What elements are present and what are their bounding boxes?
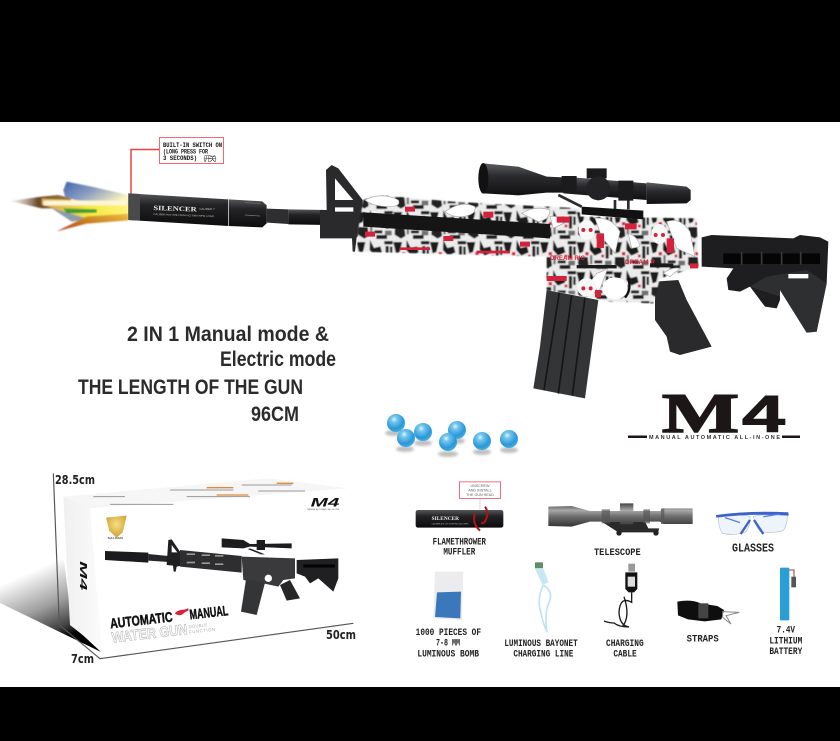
logo: M4 (628, 383, 800, 445)
accessory: telescope (548, 503, 693, 536)
box title: AUTOMATIC (109, 608, 173, 631)
callout: built-in switch: 3 SECONDS) (163, 155, 197, 162)
label: charging cable: CHARGING (606, 638, 644, 649)
dimension labels: 50cm (326, 627, 356, 642)
label: flamethrower muffler: MUFFLER (443, 546, 475, 557)
logo: M4: 4 (742, 386, 785, 444)
heading: modes and gun length: Electric mode (220, 348, 336, 371)
box title: WATER GUN (111, 622, 188, 647)
label: lithium battery: BATTERY (769, 646, 802, 657)
handguard rail (363, 212, 550, 238)
label: beads (416, 627, 481, 660)
pistol grip (655, 280, 712, 355)
box M4 marks: MANUAL AUTOMATIC ALL-IN-ONE (307, 508, 340, 511)
label: telescope: TELESCOPE (594, 547, 641, 558)
background: white product panel between black bands (0, 122, 840, 687)
label: luminous charging line: CHARGING LINE (513, 649, 573, 660)
callout: built-in switch: (LONG PRESS FOR (163, 148, 208, 156)
accessory: flamethrower muffler (416, 482, 503, 531)
muzzle flash and bullet (10, 182, 128, 231)
callout: built-in switch: BUILT-IN SWITCH ON (163, 142, 222, 149)
box title: MANUAL (189, 602, 229, 622)
heading: modes and gun length (78, 323, 336, 426)
wings and skull art: DREAM RIC (550, 256, 586, 262)
logo: M4: MANUAL AUTOMATIC ALL-IN-ONE (649, 435, 780, 441)
box title: FUNCTION (189, 627, 215, 635)
accessory: flamethrower muffler: AND INSTALL (468, 489, 492, 493)
box M4 marks: M4 (311, 495, 340, 509)
heading: modes and gun length: THE LENGTH OF THE GUN (78, 376, 303, 399)
accessory: flamethrower muffler: UNSCREW (471, 484, 490, 488)
front sight (320, 165, 363, 252)
luminous water beads (385, 414, 518, 457)
box faces (63, 478, 348, 650)
silencer attached to barrel: CALIBER 7 (199, 208, 216, 211)
magazine (533, 290, 598, 398)
accessories (416, 482, 802, 660)
heading: modes and gun length: 96CM (251, 403, 299, 426)
box title (109, 602, 231, 647)
box logo: SAI JIAN (108, 536, 123, 540)
accessory: lithium battery (780, 568, 796, 620)
dimension labels: 28.5cm (55, 472, 95, 487)
box M4 marks: M4 (77, 561, 88, 591)
label: straps: STRAPS (687, 634, 719, 645)
silencer attached to barrel: SILENCER (153, 205, 197, 214)
box gun image (105, 538, 338, 615)
accessory: flamethrower muffler: SILENCER (432, 517, 460, 522)
box title: DOUBLE (188, 622, 208, 629)
label: flamethrower muffler (433, 536, 486, 557)
box M4 marks (77, 495, 340, 591)
packaging box with dimensions (53, 473, 353, 659)
rifle scope (478, 163, 691, 219)
label: beads: 1000 PIECES OF (416, 627, 481, 638)
accessory: bead bag (433, 572, 463, 620)
stock (702, 235, 828, 333)
label: lithium battery: LITHIUM (769, 635, 802, 646)
silencer attached to barrel (128, 193, 328, 227)
callout: built-in switch (131, 138, 224, 202)
label: luminous charging line: LUMINOUS BAYONET (504, 638, 578, 649)
heading: modes and gun length: 2 IN 1 Manual mode & (127, 323, 329, 346)
accessory: charging cable (604, 564, 637, 627)
wings and skull art (365, 196, 698, 297)
dimension labels (55, 472, 356, 666)
label: flamethrower muffler: FLAMETHROWER (433, 536, 486, 547)
wings and skull art: DREAM R (625, 260, 656, 266)
label: luminous charging line (504, 638, 578, 660)
callout: built-in switch: （开关） (199, 154, 221, 163)
accessory: glasses (716, 512, 789, 535)
box floor shadow (0, 560, 101, 652)
dimension lines (53, 473, 353, 659)
silencer attached to barrel: CALIBER:AUT 029-12HM HQ 2000 WPM LONG (153, 213, 214, 218)
camouflage upper and handguard (357, 195, 698, 303)
label: lithium battery: 7.4V (777, 625, 795, 636)
accessory: luminous charging line (535, 562, 550, 632)
accessory: flamethrower muffler: CALIBER AUT 029 12HM HQ 2000 WPM (432, 522, 469, 525)
accessory: flamethrower muffler: THE GUN HEAD (466, 493, 494, 497)
logo: M4: M (662, 383, 739, 445)
rifle (320, 163, 828, 398)
label: charging cable (606, 638, 644, 660)
trigger guard opening (602, 277, 629, 299)
dimension labels: 7cm (71, 651, 94, 666)
box logo (106, 516, 127, 540)
label: glasses: GLASSES (732, 541, 774, 555)
label: lithium battery (769, 625, 802, 657)
accessory: straps (677, 601, 739, 624)
label: charging cable: CABLE (613, 649, 637, 660)
label: beads: 7-8 MM (436, 637, 460, 648)
label: beads: LUMINOUS BOMB (417, 649, 479, 660)
